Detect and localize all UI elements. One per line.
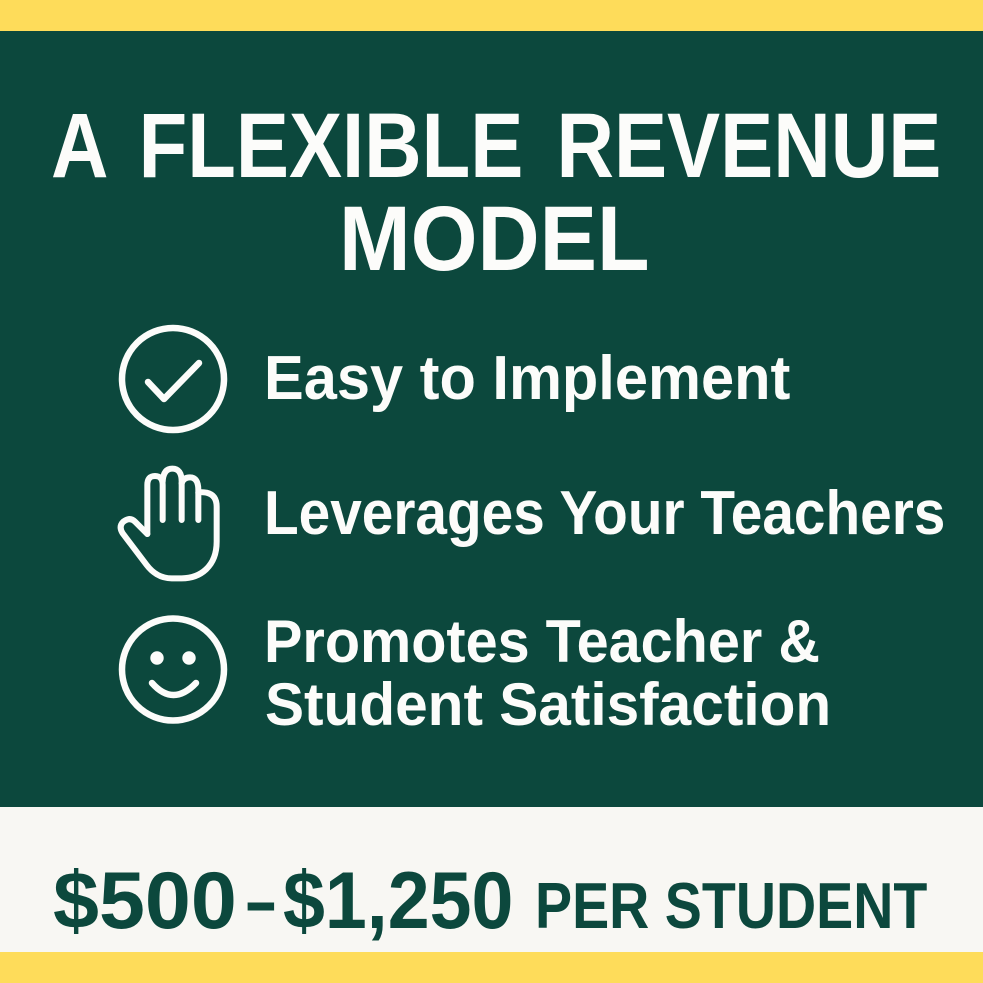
icon: smiley face [118,615,228,724]
price amount [53,856,513,946]
per student label: PER STUDENT [535,870,927,942]
bottom yellow band [0,952,983,983]
top yellow band [0,0,983,31]
title: MODEL [339,188,650,290]
icon: raised hand [118,466,220,582]
price amount: $1,250 [283,856,513,946]
text: easy to implement: Easy to Implement [264,343,790,413]
icon: check circle [118,324,228,434]
price amount: $500 [53,856,237,946]
price amount: – [246,856,276,946]
text: promotes satisfaction: Student Satisfaction [265,671,831,738]
title [51,95,941,290]
text: promotes satisfaction: Promotes Teacher & [264,608,820,675]
text: leverages your teachers: Leverages Your Teachers [264,478,945,548]
price panel [0,807,983,952]
text: promotes satisfaction [264,608,831,738]
title: A FLEXIBLE REVENUE [51,95,941,197]
